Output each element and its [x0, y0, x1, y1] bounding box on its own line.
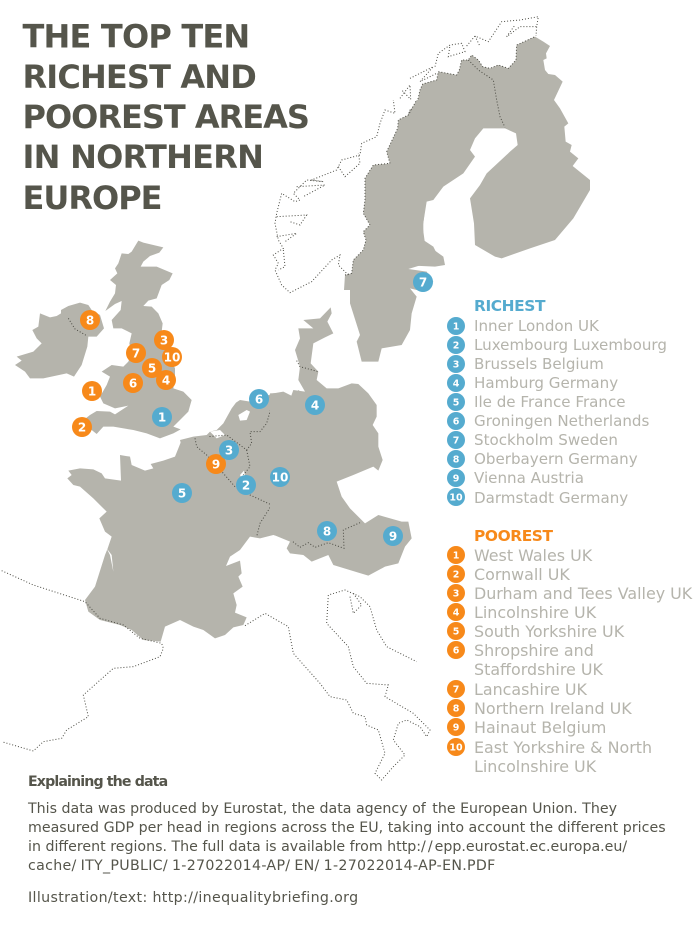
map marker: poorest 2: 2 — [78, 420, 86, 434]
map marker: richest 5: 5 — [178, 486, 186, 500]
map marker: poorest 1 — [82, 381, 102, 401]
legend: richest: 2 — [453, 340, 459, 352]
map: southern Sweden — [273, 100, 440, 362]
legend: richest: Groningen Netherlands — [474, 412, 650, 430]
legend: poorest: 4 — [453, 608, 460, 618]
legend: richest: 7 — [453, 436, 459, 446]
map marker: poorest 7 — [126, 343, 146, 363]
map marker: poorest 9: 9 — [212, 458, 220, 472]
map: Germany, Austria and Denmark — [270, 307, 412, 576]
map: Ireland and Great Britain — [15, 241, 192, 438]
legend: poorest: 10 — [449, 742, 463, 754]
legend: poorest: South Yorkshire UK — [474, 622, 625, 641]
map marker: poorest 6: 6 — [129, 376, 137, 390]
legend: richest: Darmstadt Germany — [474, 489, 628, 507]
map marker: poorest 7: 7 — [132, 346, 140, 360]
map marker: poorest 9 — [206, 454, 226, 474]
legend: poorest: Lancashire UK — [474, 680, 588, 699]
legend: richest: Hamburg Germany — [474, 374, 618, 392]
map: Benelux — [180, 390, 317, 537]
map marker: richest 10 — [270, 467, 290, 487]
map marker: richest 4 — [305, 395, 325, 415]
legend: poorest — [447, 527, 693, 776]
legend: poorest: 8 — [453, 704, 460, 714]
title: RICHEST AND — [22, 58, 256, 96]
legend: poorest: 1 — [453, 550, 459, 562]
legend: poorest: Northern Ireland UK — [474, 699, 632, 718]
legend heading: richest: RICHEST — [474, 297, 546, 315]
map marker: richest 6: 6 — [255, 392, 263, 406]
text block: data explanation — [27, 801, 666, 874]
map marker: richest 2 — [236, 475, 256, 495]
map marker: poorest 10: 10 — [164, 350, 180, 364]
map marker: richest 10: 10 — [272, 470, 288, 484]
map marker: richest 9 — [383, 526, 403, 546]
map marker: poorest 1: 1 — [88, 384, 96, 398]
legend: richest: Luxembourg Luxembourg — [474, 336, 667, 354]
title: EUROPE — [22, 179, 162, 217]
map marker: richest 1: 1 — [158, 410, 166, 424]
map marker: poorest 3: 3 — [160, 334, 168, 348]
text block: data explanation: measured GDP per head in regions across the EU, taking into account the different prices — [28, 820, 666, 836]
legend: richest: Oberbayern Germany — [474, 450, 638, 468]
legend: richest: Ile de France France — [474, 393, 626, 411]
map marker: poorest 4 — [156, 370, 176, 390]
legend heading: poorest: POOREST — [474, 527, 553, 545]
legend: poorest: Durham and Tees Valley UK — [474, 584, 693, 603]
legend: richest — [447, 297, 667, 507]
legend: poorest: Cornwall UK — [474, 565, 570, 584]
map marker: richest 5 — [172, 483, 192, 503]
legend: poorest: Shropshire and — [474, 641, 594, 660]
legend: richest: 8 — [453, 454, 460, 466]
map marker: poorest 8 — [80, 310, 100, 330]
text block: data explanation: This data was produced by Eurostat, the data agency of the European Union. They — [27, 801, 617, 817]
legend: poorest: 5 — [453, 626, 459, 638]
legend: richest: Inner London UK — [474, 317, 600, 335]
legend: poorest: West Wales UK — [474, 546, 593, 565]
map marker: richest 8 — [317, 521, 337, 541]
title: POOREST AREAS — [22, 98, 309, 136]
map marker: richest 8: 8 — [323, 524, 331, 538]
map marker: poorest 3 — [154, 330, 174, 350]
map: Europe — [2, 17, 590, 780]
legend: poorest: Lincolnshire UK — [474, 603, 597, 622]
legend: richest: Vienna Austria — [474, 469, 584, 487]
legend: richest: Stockholm Sweden — [474, 431, 618, 449]
credit: Illustration/text: http://inequalitybriefing.org — [28, 890, 358, 906]
legend: poorest: 7 — [453, 684, 459, 696]
map marker: poorest 5 — [142, 358, 162, 378]
map marker: richest 7 — [413, 272, 433, 292]
title: IN NORTHERN — [22, 138, 263, 176]
map marker: richest 6 — [249, 389, 269, 409]
legend: richest: 9 — [453, 474, 459, 484]
legend: poorest: 6 — [453, 646, 460, 656]
map marker: richest 1 — [152, 407, 172, 427]
map marker: richest 7: 7 — [419, 276, 427, 290]
legend: richest: 1 — [453, 322, 459, 332]
heading: explaining the data: Explaining the data — [28, 774, 168, 790]
map: Sweden and Finland north — [400, 17, 590, 267]
map marker: poorest 6 — [123, 373, 143, 393]
text block: data explanation: in different regions. The full data is available from http://epp.eurostat.ec.europa.eu/ — [28, 839, 627, 855]
map marker: poorest 2 — [72, 417, 92, 437]
map marker: poorest 10 — [162, 347, 182, 367]
legend: richest: 6 — [453, 416, 460, 428]
title — [22, 18, 309, 217]
map: France — [67, 440, 280, 642]
legend: richest: 5 — [453, 398, 459, 408]
map marker: richest 9: 9 — [389, 530, 397, 544]
legend: richest: 3 — [453, 360, 459, 370]
legend: poorest: Staffordshire UK — [474, 660, 603, 679]
legend: poorest: 3 — [453, 588, 459, 600]
title: THE TOP TEN — [22, 18, 249, 56]
legend: poorest: Hainaut Belgium — [474, 718, 606, 737]
legend: richest: 10 — [449, 492, 463, 504]
map marker: richest 3 — [219, 440, 239, 460]
map marker: poorest 8: 8 — [86, 314, 94, 328]
map marker: poorest 5: 5 — [148, 362, 156, 376]
map marker: richest 4: 4 — [311, 398, 319, 412]
map: Spain and Italy borders — [2, 571, 430, 780]
legend: richest: Brussels Belgium — [474, 355, 604, 373]
legend: poorest: 2 — [453, 570, 459, 580]
text block: data explanation: cache/ ITY_PUBLIC/ 1-27022014-AP/ EN/ 1-27022014-AP-EN.PDF — [28, 858, 496, 874]
map marker: richest 3: 3 — [225, 444, 233, 458]
map marker: richest 2: 2 — [242, 478, 250, 492]
legend: poorest: East Yorkshire & North — [474, 738, 652, 757]
legend: richest: 4 — [453, 378, 460, 390]
legend: poorest: Lincolnshire UK — [474, 757, 597, 776]
map marker: poorest 4: 4 — [162, 374, 170, 388]
legend: poorest: 9 — [453, 722, 459, 734]
